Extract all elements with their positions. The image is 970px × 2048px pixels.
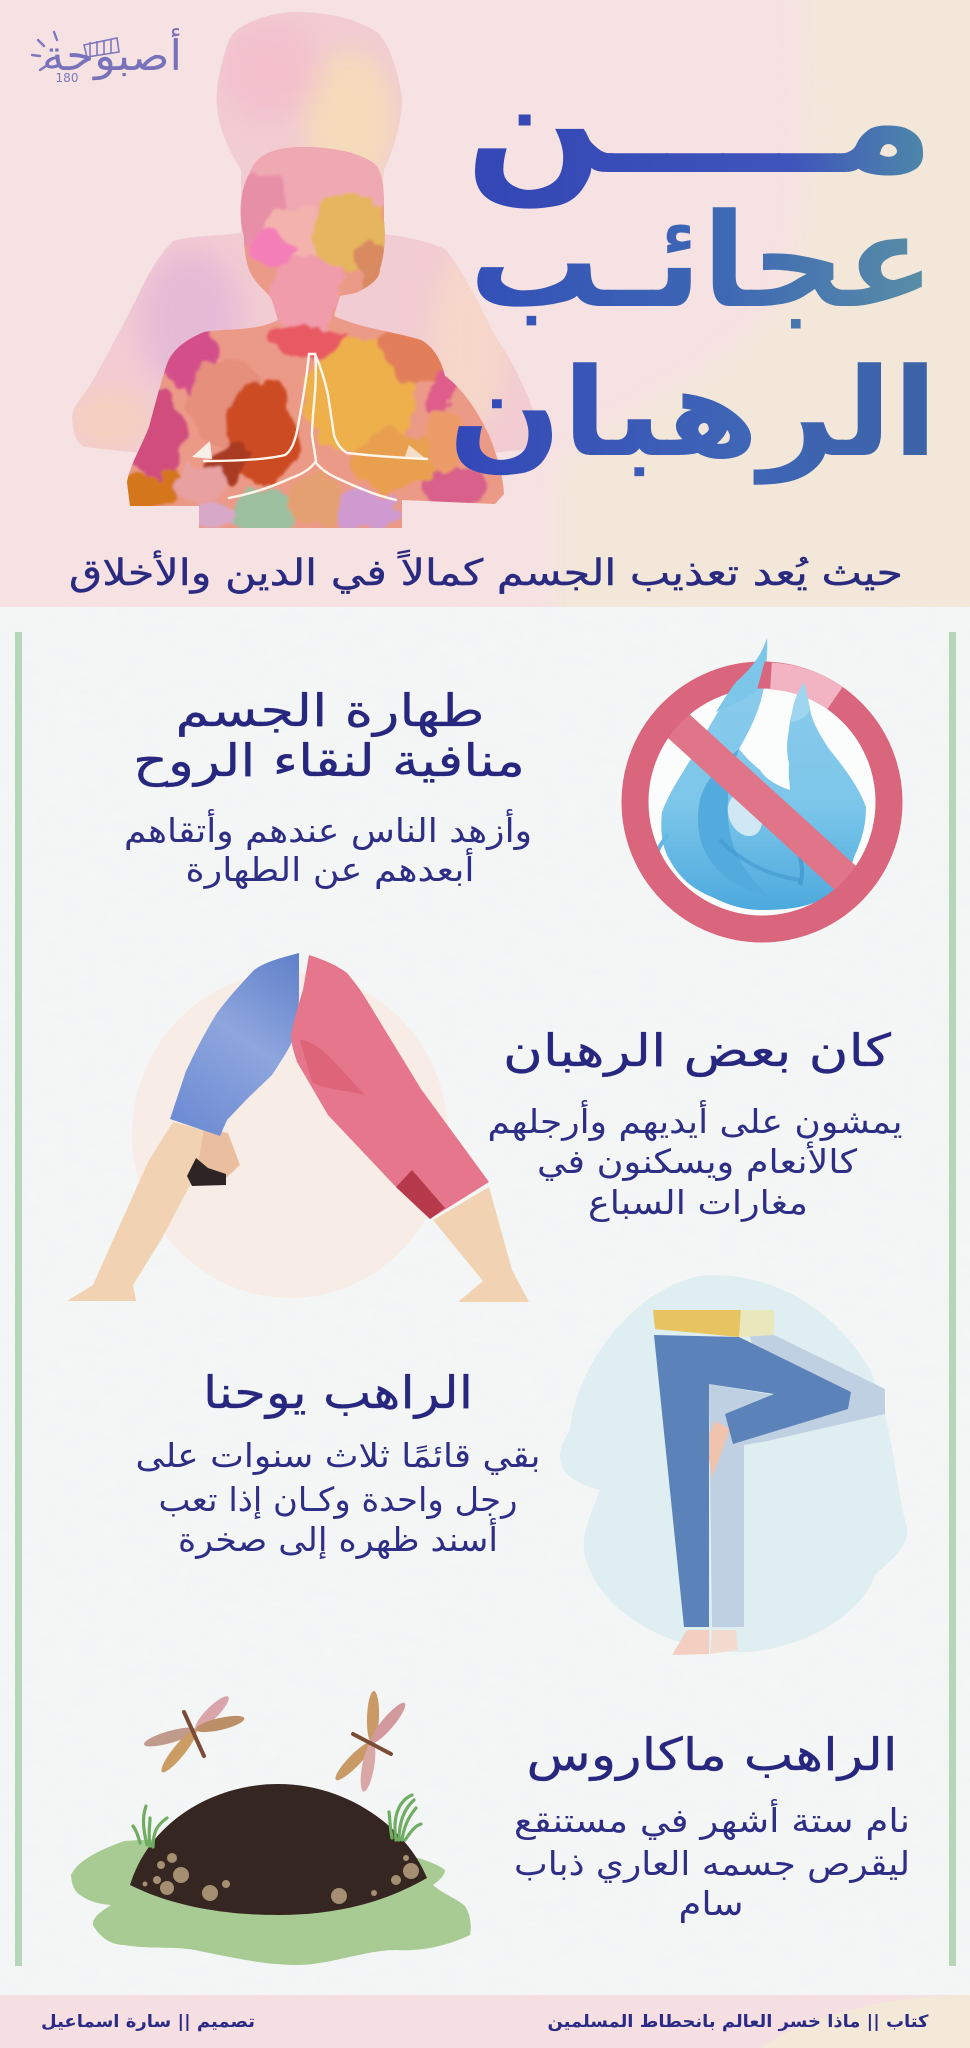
back silhouette xyxy=(72,12,533,452)
text block: some monks: مغارات السباع xyxy=(588,1183,808,1222)
panel: footer xyxy=(0,1995,970,2048)
text block: body cleanliness xyxy=(124,684,532,889)
title: مــــن xyxy=(465,34,935,209)
text block: monk John: أسند ظهره إلى صخرة xyxy=(178,1518,498,1560)
text block: body cleanliness: طهارة الجسم xyxy=(176,684,484,737)
title xyxy=(448,34,938,485)
hands outline xyxy=(204,354,427,500)
hand xyxy=(195,1128,240,1185)
ring xyxy=(635,675,889,929)
text block: monk John: الراهب يوحنا xyxy=(203,1366,473,1419)
illustration: figure on all fours xyxy=(67,953,529,1302)
text block: body cleanliness: وأزهد الناس عندهم وأتقاهم xyxy=(124,809,532,850)
logo: 180 xyxy=(56,71,78,85)
pale shadow leg xyxy=(709,1310,885,1627)
left border bar xyxy=(15,632,22,1966)
title: الرهبان xyxy=(448,342,938,485)
text block: some monks: كان بعض الرهبان xyxy=(503,1024,892,1077)
leg xyxy=(433,1187,529,1302)
illustration: swamp and flies xyxy=(71,1691,471,1965)
text block: monk Macarius: ليقرص جسمه العاري ذباب xyxy=(514,1844,910,1884)
front silhouette xyxy=(127,147,504,528)
slash xyxy=(672,720,852,884)
illustration: praying figure xyxy=(72,12,533,528)
text block: some monks: كالأنعام ويسكنون في xyxy=(537,1141,857,1181)
text block: some monks: يمشون على أيديهم وأرجلهم xyxy=(488,1100,902,1141)
arm gaps xyxy=(192,441,212,459)
green puddle xyxy=(71,1838,471,1965)
feet xyxy=(672,1630,709,1655)
text block: monk Macarius xyxy=(514,1728,910,1923)
source credit: كتاب || ماذا خسر العالم بانحطاط المسلمين xyxy=(548,2012,929,2032)
water tip over ring xyxy=(716,638,767,712)
panel: header background xyxy=(0,0,970,647)
text block: body cleanliness: منافية لنقاء الروح xyxy=(133,734,525,788)
wristband xyxy=(187,1158,226,1186)
shorts xyxy=(170,953,299,1136)
text block: monk John: رجل واحدة وكـان إذا تعب xyxy=(158,1480,518,1520)
dragonfly right xyxy=(332,1691,409,1793)
dragonfly left xyxy=(142,1692,246,1776)
mud mound xyxy=(130,1784,427,1915)
subtitle: حيث يُعد تعذيب الجسم كمالاً في الدين والأخلاق xyxy=(69,550,903,594)
icon: no water xyxy=(635,638,889,929)
text block: monk Macarius: سام xyxy=(678,1884,744,1923)
arm xyxy=(67,1122,222,1301)
grass xyxy=(133,1795,421,1847)
text block: monk Macarius: الراهب ماكاروس xyxy=(526,1728,898,1782)
text block: monk John: بقي قائمًا ثلاث سنوات على xyxy=(136,1436,540,1475)
logo: أصبوحة xyxy=(42,28,182,80)
text block: some monks xyxy=(488,1024,902,1222)
title: عجائـب xyxy=(469,185,935,337)
raised foot xyxy=(706,1421,730,1478)
paper texture xyxy=(0,607,970,1995)
right border bar xyxy=(949,632,956,1966)
trousers xyxy=(291,955,489,1219)
illustration: standing on one leg xyxy=(560,1275,907,1655)
water drop xyxy=(661,638,866,910)
pebbles xyxy=(142,1853,419,1904)
text block: body cleanliness: أبعدهم عن الطهارة xyxy=(186,848,474,889)
designer credit: تصميم || سارة اسماعيل xyxy=(41,2012,255,2032)
text block: monk John xyxy=(136,1366,540,1560)
waistband xyxy=(653,1310,741,1337)
text block: monk Macarius: نام ستة أشهر في مستنقع xyxy=(514,1799,910,1840)
jeans xyxy=(654,1335,851,1627)
